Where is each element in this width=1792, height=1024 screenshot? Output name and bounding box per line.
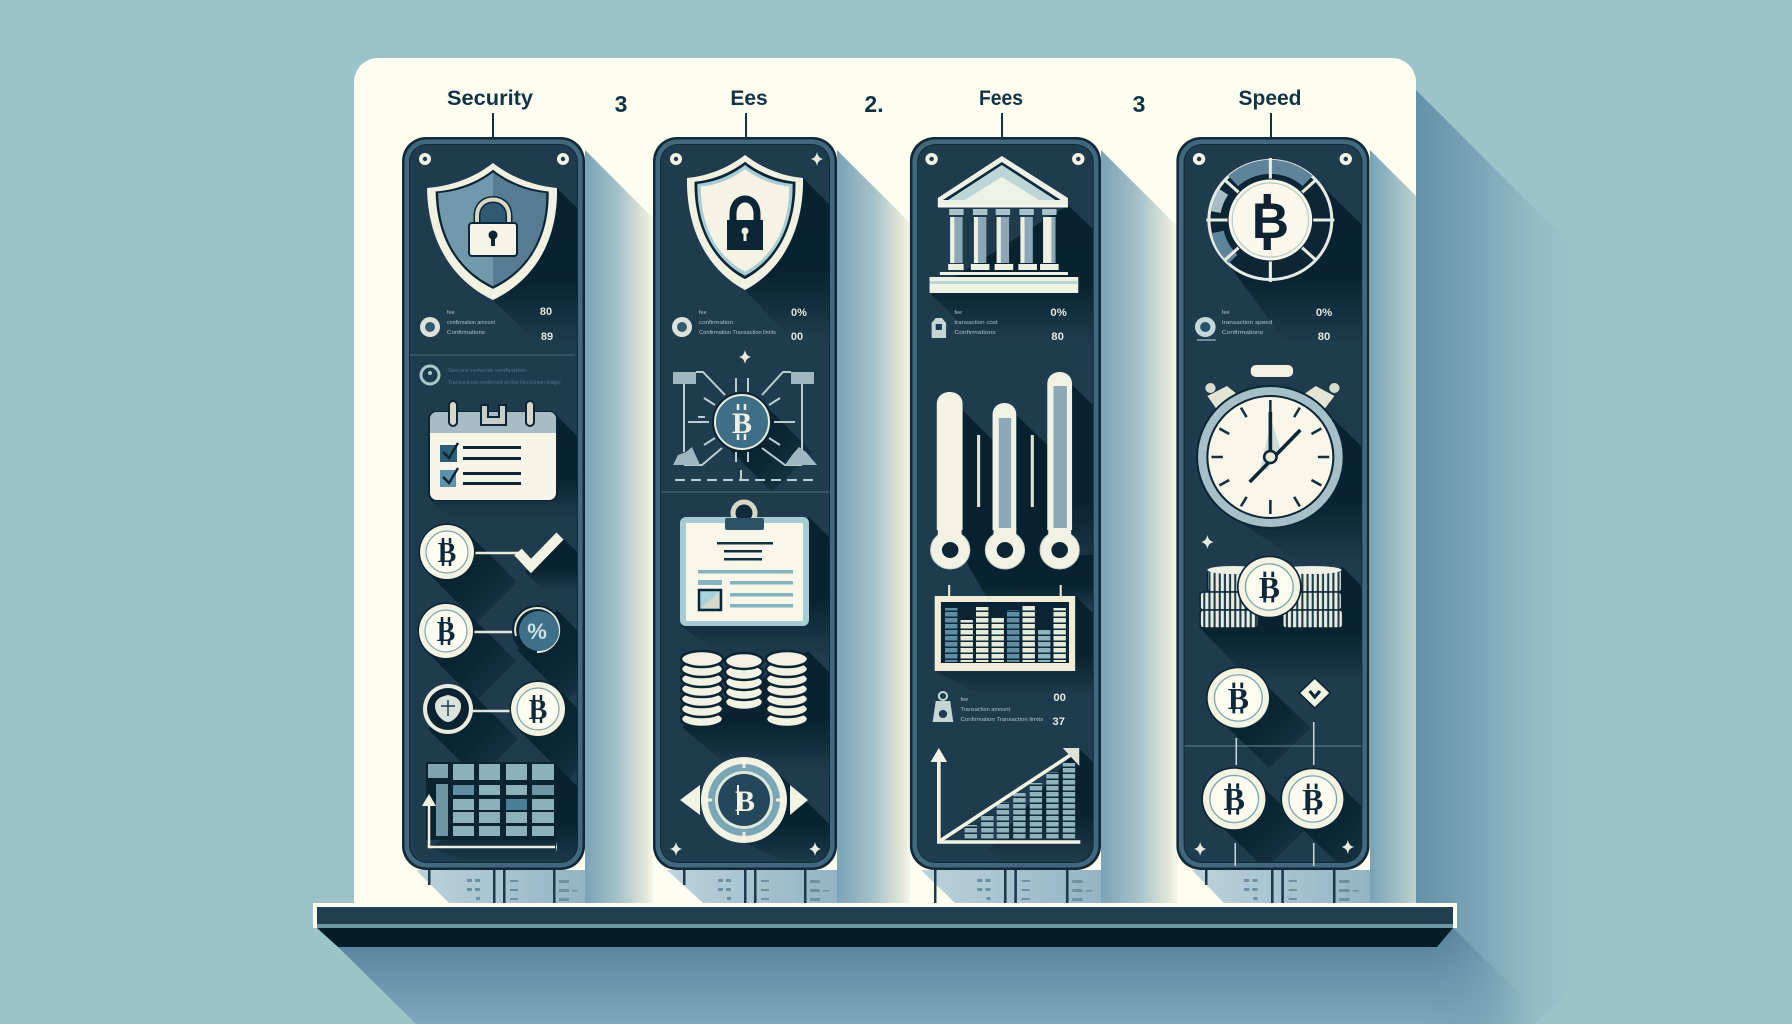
- info row: fee: [699, 310, 707, 316]
- info row: 89: [541, 331, 553, 343]
- panel: Speed: [1176, 137, 1385, 870]
- number 3: 3: [615, 91, 627, 117]
- heading: Fees: Fees: [979, 87, 1023, 110]
- cream board: [354, 58, 1416, 908]
- info row: fee: [954, 310, 962, 316]
- icon: bitcoin wheel: B: [1252, 193, 1289, 249]
- badge linked to coin: [423, 680, 566, 738]
- number 2: 2.: [864, 91, 884, 117]
- icon: coin with left and right arrows: B: [735, 785, 755, 818]
- heading: Ees: Ees: [730, 87, 768, 110]
- info row: [933, 692, 1066, 728]
- bar chart frame: [935, 585, 1075, 671]
- table chart: [422, 762, 557, 852]
- icon: coin with left and right arrows: [680, 757, 808, 843]
- info row: Confirmation Transaction limits: [961, 717, 1043, 723]
- icon: clipboard form: [680, 502, 809, 626]
- coin with check mark: [418, 524, 560, 580]
- icon: coin stacks: [681, 651, 808, 727]
- coin linked to percent badge: [418, 602, 562, 660]
- info row: 0%: [1050, 307, 1067, 319]
- coin: B: [1302, 782, 1323, 817]
- panel cast shadows on board: [416, 150, 1416, 903]
- info row: [420, 306, 553, 343]
- sparkle: [739, 350, 751, 364]
- info row: 80: [1318, 331, 1330, 343]
- board drop shadow: [1416, 90, 1575, 1024]
- coin: B: [1223, 783, 1245, 817]
- sparkles: [1194, 840, 1354, 856]
- coin: [1280, 768, 1345, 830]
- coin with check mark: B: [438, 538, 456, 569]
- sparkle: [1201, 535, 1214, 549]
- info row: [932, 307, 1067, 343]
- panel: Fees: [910, 137, 1101, 870]
- diamond marker: [1299, 678, 1330, 708]
- rivet and sparkle: [670, 152, 823, 166]
- info row: fee: [447, 310, 455, 316]
- security note: [421, 366, 561, 386]
- panel: Security: [402, 137, 585, 870]
- badge linked to coin: B: [529, 695, 547, 726]
- coin linked to percent badge: %: [527, 619, 547, 644]
- info row: 0%: [1316, 307, 1332, 319]
- info row: fee: [961, 697, 968, 703]
- security note: Secure network verification: [448, 368, 526, 374]
- icon: bank building: [930, 156, 1078, 293]
- info row: 80: [540, 306, 552, 318]
- divider: [410, 354, 575, 356]
- icon: coin stacks with coin: [1200, 556, 1343, 628]
- info row: Confirmations: [954, 330, 996, 336]
- info row: Confirmations: [1222, 330, 1263, 336]
- panel: Ees: [653, 137, 840, 870]
- info row: Transaction amount: [961, 707, 1011, 713]
- bottom tabs under panels: [428, 870, 1359, 903]
- rivets: [419, 153, 569, 165]
- sparkles: [670, 842, 821, 856]
- icon: coin stacks with coin: B: [1259, 570, 1280, 605]
- heading: Security: Security: [447, 87, 533, 110]
- shelf: [313, 903, 1457, 947]
- coin linked to percent badge: B: [437, 617, 455, 648]
- info row: 37: [1052, 716, 1065, 728]
- coin: [1201, 767, 1267, 831]
- info row: confirmation amount: [447, 320, 495, 326]
- shelf drop shadow: [338, 928, 1550, 1024]
- icon: bitcoin network diagram: [673, 372, 817, 480]
- coin: B: [1228, 681, 1249, 716]
- divider and connector lines: [1185, 722, 1361, 866]
- info row: [1195, 307, 1332, 343]
- icon: calendar checklist: [428, 401, 558, 501]
- icon: shield with padlock: [687, 155, 803, 290]
- connector lines: [493, 113, 1271, 138]
- info row: 00: [1053, 692, 1066, 704]
- number 3: 3: [1133, 91, 1145, 117]
- info row: 0%: [791, 307, 807, 319]
- divider: [661, 491, 829, 493]
- growth chart: [931, 748, 1080, 842]
- info row: confirmation: [699, 320, 733, 326]
- info row: Confirmation Transaction limits: [699, 330, 776, 336]
- coin: [1206, 667, 1271, 729]
- info row: transaction speed: [1222, 320, 1272, 326]
- info row: fee: [1222, 310, 1230, 316]
- info row: [672, 307, 807, 343]
- thermometer bars: [931, 372, 1079, 569]
- icon: stopwatch: [1196, 365, 1345, 529]
- info row: 80: [1051, 331, 1064, 343]
- security note: Transactions confirmed on the blockchain ledger: [448, 380, 561, 386]
- rivets: [1193, 153, 1352, 165]
- info row: 00: [791, 331, 803, 343]
- info row: transaction cost: [954, 320, 998, 326]
- icon: bitcoin wheel: [1206, 158, 1334, 282]
- info row: Confirmations: [447, 330, 485, 336]
- heading: Speed: Speed: [1238, 87, 1302, 110]
- rivets: [925, 153, 1084, 165]
- icon: shield with padlock: [427, 163, 557, 300]
- icon: bitcoin network diagram: B: [732, 407, 752, 440]
